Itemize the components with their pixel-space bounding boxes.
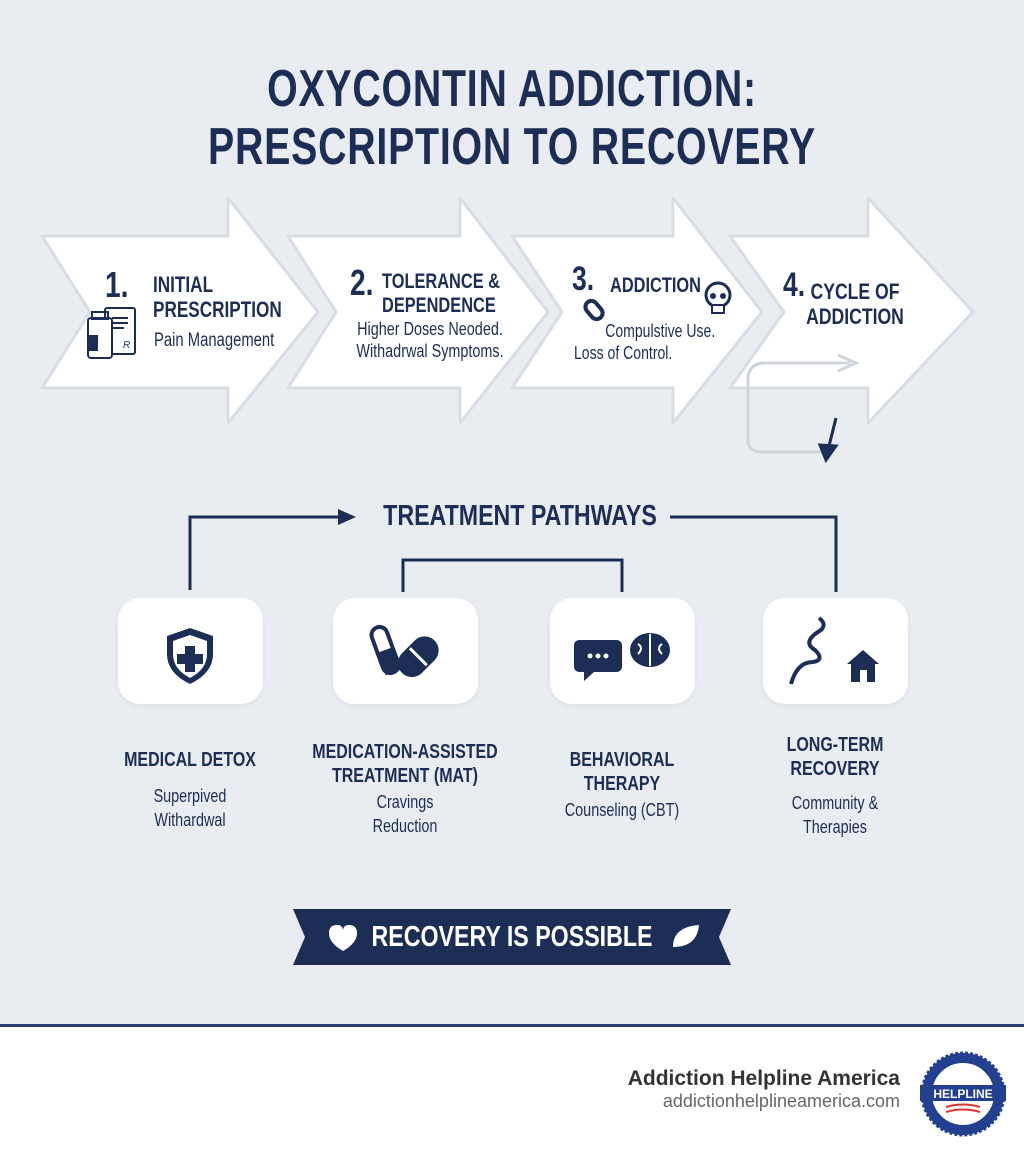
label: long-term recovery — [787, 734, 883, 837]
arrow 4 — [730, 198, 973, 423]
connectors — [188, 509, 838, 592]
label: long-term recovery: Therapies — [803, 817, 867, 837]
text: PRESCRIPTION — [153, 297, 282, 322]
label: long-term recovery: RECOVERY — [790, 758, 880, 780]
title: PRESCRIPTION TO RECOVERY — [208, 118, 816, 176]
label: medical detox: Withardwal — [154, 810, 226, 830]
footer brand text: Addiction Helpline America — [628, 1067, 900, 1090]
label: long-term recovery: LONG-TERM — [787, 734, 883, 756]
title: OXYCONTIN ADDICTION: — [267, 60, 757, 118]
arrow 3 — [512, 198, 762, 423]
text: Withadrwal Symptoms. — [356, 341, 504, 361]
step 4 text: 4. — [783, 266, 805, 304]
label: medical detox: Superpived — [154, 786, 226, 806]
footer logo: HELPLINE — [933, 1087, 993, 1101]
text: INITIAL — [153, 272, 213, 297]
label: behavioral therapy: Counseling (CBT) — [565, 800, 679, 820]
footer logo — [920, 1052, 1006, 1136]
label: MAT: Reduction — [373, 816, 437, 836]
footer brand text: addictionhelplineamerica.com — [663, 1091, 900, 1111]
process arrows: R — [123, 340, 130, 351]
text: TOLERANCE & — [382, 270, 500, 293]
footer brand text — [628, 1067, 900, 1111]
label: behavioral therapy — [565, 749, 679, 820]
arrow 2 — [288, 198, 548, 423]
arrow 1 — [42, 198, 318, 423]
text: ADDICTION — [610, 274, 701, 297]
title — [208, 60, 816, 176]
text: DEPENDENCE — [382, 294, 496, 317]
footer — [0, 1024, 1024, 1154]
label: behavioral therapy: BEHAVIORAL — [570, 749, 674, 771]
text: Loss of Control. — [574, 343, 672, 363]
heading: treatment pathways: TREATMENT PATHWAYS — [383, 500, 657, 532]
cycle loop icon — [748, 355, 856, 452]
label: MAT: Cravings — [377, 792, 433, 812]
label: long-term recovery: Community & — [792, 793, 878, 813]
down arrow — [820, 418, 836, 460]
step 3 text: 3. — [572, 260, 594, 298]
card: behavioral therapy icon — [550, 598, 695, 704]
icon: skull — [706, 283, 730, 313]
banner: recovery is possible — [293, 909, 731, 965]
label: medical detox — [124, 749, 256, 830]
label: MAT: TREATMENT (MAT) — [332, 765, 478, 787]
card: medical detox icon — [118, 598, 263, 704]
label: behavioral therapy: THERAPY — [584, 773, 660, 795]
step 1 text: 1. — [105, 264, 128, 305]
text: ADDICTION — [806, 304, 904, 329]
step 2 text: 2. — [350, 262, 373, 303]
text: Pain Management — [154, 330, 274, 351]
process arrows — [40, 196, 974, 463]
text: CYCLE OF — [810, 279, 899, 304]
icon: prescription — [88, 308, 135, 358]
label: MAT — [312, 741, 498, 836]
label: medical detox: MEDICAL DETOX — [124, 749, 256, 771]
text: Higher Doses Neoded. — [357, 319, 503, 339]
icon: broken chain — [583, 298, 605, 322]
card: long-term recovery icon — [763, 598, 908, 704]
label: MAT: MEDICATION-ASSISTED — [312, 741, 498, 763]
card: MAT icon — [333, 598, 478, 704]
text: Compulstive Use. — [605, 321, 715, 341]
banner: recovery is possible: RECOVERY IS POSSIBLE — [371, 921, 653, 953]
